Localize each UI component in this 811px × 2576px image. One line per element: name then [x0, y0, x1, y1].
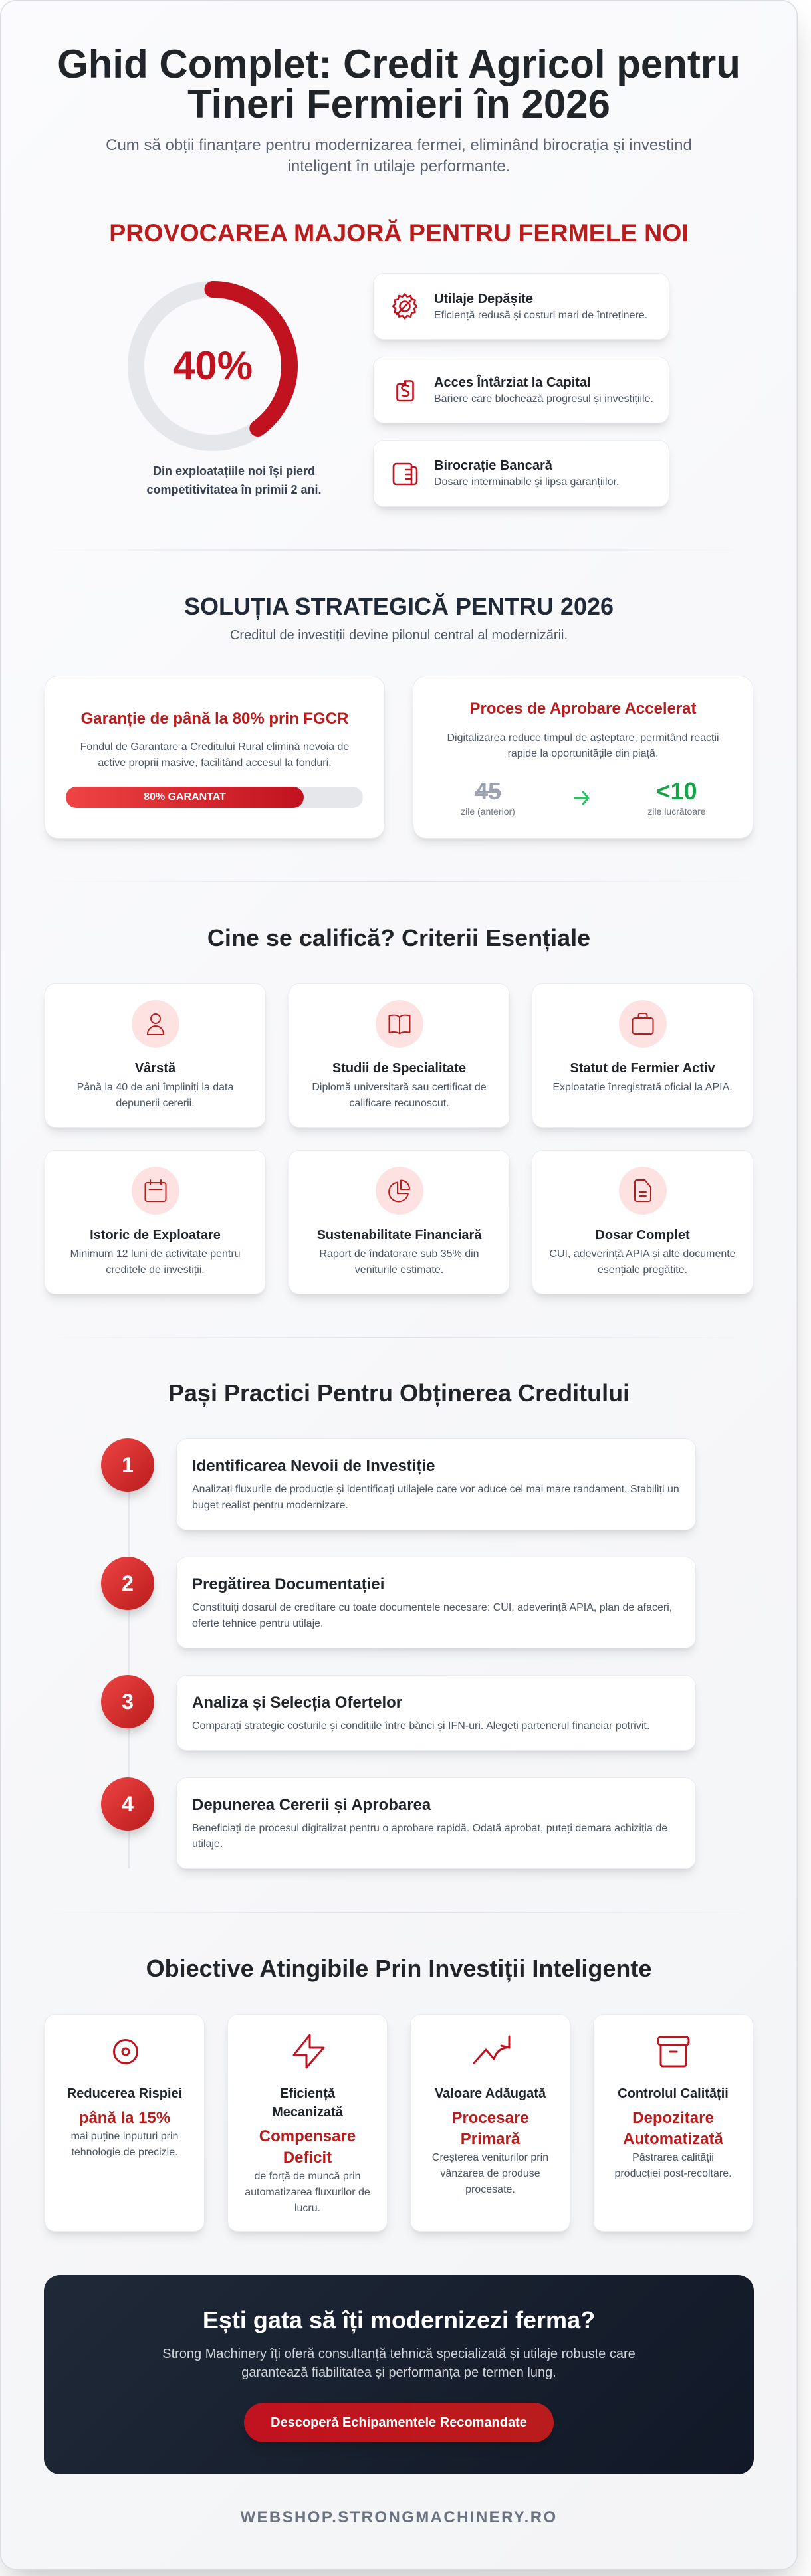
panel: complete file [532, 1150, 753, 1294]
step text: utilaje. [192, 1838, 223, 1850]
goal text: tehnologie de precizie. [71, 2147, 178, 2158]
step 3 number: 3 [122, 1690, 134, 1714]
CTA heading: Ești gata să îți modernizezi ferma? [203, 2306, 595, 2333]
step text: oferte tehnice pentru utilaje. [192, 1618, 323, 1629]
icon: open book [376, 1000, 423, 1048]
panel: bank bureaucracy [373, 440, 669, 507]
panel: age [45, 983, 266, 1128]
card title: Birocrație Bancară [434, 458, 552, 473]
criterion title: Studii de Specialitate [332, 1061, 466, 1076]
criterion text [549, 1248, 736, 1276]
step 3 card [176, 1675, 696, 1751]
goal text: Păstrarea calității [632, 2152, 714, 2163]
goal text: mai puține inputuri prin [71, 2131, 178, 2142]
heading: major challenge: PROVOCAREA MAJORĂ PENTRU FERMELE NOI [109, 219, 689, 247]
panel: FGCR guarantee [45, 676, 385, 839]
panel: farming history [45, 1150, 266, 1294]
subtitle [106, 136, 692, 175]
panel: financial sustainability [289, 1150, 510, 1294]
heading: practical steps: Pași Practici Pentru Obținerea Creditului [168, 1379, 630, 1407]
step text: Constituiți dosarul de creditare cu toate documentele necesare: CUI, adeverință APIA, plan de afaceri, [192, 1602, 672, 1613]
old value label: zile (anterior) [461, 806, 515, 817]
stat: under 10 working days [647, 777, 706, 817]
CTA button [244, 2403, 554, 2442]
title: Ghid Complet: Credit Agricol pentru [57, 42, 741, 86]
step 4 number [101, 1777, 154, 1831]
step text: Analizați fluxurile de producție și identificați utilajele care vor aduce cel mai mare randament. Stabiliți un [192, 1484, 679, 1495]
old value: 45 [475, 777, 501, 805]
timeline line [128, 1438, 130, 1868]
goal highlight: Primară [461, 2130, 520, 2148]
goal text [71, 2131, 178, 2158]
goal highlight: Automatizată [623, 2130, 723, 2148]
title: Tineri Fermieri în 2026 [187, 82, 610, 126]
step title: Identificarea Nevoii de Investiție [192, 1457, 435, 1475]
goal text [432, 2152, 548, 2195]
criterion text: esențiale pregătite. [598, 1264, 687, 1276]
card title: Proces de Aprobare Accelerat [469, 700, 697, 718]
call to action panel [44, 2275, 754, 2474]
goal text: Creșterea veniturilor prin [432, 2152, 548, 2163]
criterion title: Sustenabilitate Financiară [317, 1228, 481, 1242]
icon: trend line [473, 2036, 511, 2064]
panel: accelerated approval [413, 676, 753, 839]
new value label: zile lucrătoare [647, 806, 706, 817]
criterion text [312, 1082, 487, 1109]
goal text: procesate. [465, 2184, 515, 2195]
criterion text: Diplomă universitară sau certificat de [312, 1082, 487, 1093]
panel: outdated machinery [373, 273, 669, 340]
panel: studies [289, 983, 510, 1128]
icon: pie chart [376, 1167, 423, 1215]
CTA button: Descoperă Echipamentele Recomandate [271, 2415, 527, 2430]
goal highlight [623, 2109, 723, 2148]
criterion text: veniturile estimate. [355, 1264, 443, 1276]
progress fill: 80% GARANTAT [144, 791, 226, 803]
icon: gear [392, 293, 417, 320]
icon: lightning bolt [292, 2034, 324, 2069]
card title: Garanție de până la 80% prin FGCR [81, 710, 348, 728]
new value: <10 [656, 777, 697, 805]
goal title [272, 2086, 343, 2120]
CTA text: garantează fiabilitatea și performanța pe termen lung. [241, 2365, 556, 2380]
step 3 number [101, 1675, 154, 1728]
criterion text: CUI, adeverință APIA și alte documente [549, 1248, 736, 1260]
CTA text: Strong Machinery îți oferă consultanță tehnică specializată și utilaje robuste care [162, 2347, 636, 2361]
criterion title: Statut de Fermier Activ [570, 1061, 715, 1076]
icon: calendar [132, 1167, 179, 1215]
step 1 number: 1 [122, 1453, 134, 1477]
goal text: automatizarea fluxurilor de [245, 2187, 370, 2198]
goal highlight [259, 2128, 356, 2167]
icon: ledger [392, 462, 417, 485]
step 1 number [101, 1438, 154, 1492]
card title: Acces Întârziat la Capital [434, 375, 591, 390]
goal title: Controlul Calității [618, 2086, 729, 2101]
step 4 card [176, 1777, 696, 1869]
step 1 card [176, 1438, 696, 1530]
criterion title: Vârstă [135, 1061, 175, 1076]
CTA text [162, 2347, 636, 2380]
criterion text [77, 1082, 234, 1109]
step title: Depunerea Cererii și Aprobarea [192, 1796, 431, 1814]
card text [447, 732, 719, 759]
donut caption: Din exploatațiile noi își pierd [153, 464, 315, 478]
criterion text [70, 1248, 241, 1276]
donut caption: competitivitatea în primii 2 ani. [146, 483, 322, 496]
goal title: Valoare Adăugată [435, 2086, 546, 2101]
goal text: lucru. [294, 2203, 320, 2214]
card text: rapide la oportunitățile din piață. [508, 748, 658, 759]
step text [192, 1484, 679, 1511]
step text: Comparați strategic costurile și condițiile între bănci și IFN-uri. Alegeți partenerul financiar potrivit. [192, 1720, 649, 1732]
criterion text: Până la 40 de ani împliniți la data [77, 1082, 233, 1093]
goal title: Mecanizată [272, 2105, 343, 2120]
panel: quality control [593, 2014, 753, 2232]
goal highlight [451, 2109, 529, 2148]
panel: delayed capital access [373, 357, 669, 423]
step 2 card [176, 1557, 696, 1648]
icon: arrow [574, 791, 589, 805]
card title: Utilaje Depășite [434, 292, 533, 306]
goal text [245, 2171, 370, 2214]
goal text [614, 2152, 732, 2179]
donut chart: 40% [128, 281, 298, 451]
goal text: de forță de muncă prin [254, 2171, 361, 2182]
criterion text [319, 1248, 479, 1276]
step text [192, 1823, 667, 1850]
goal title: Eficiență [280, 2086, 335, 2101]
criterion title: Dosar Complet [595, 1228, 690, 1242]
step 4 number: 4 [122, 1792, 134, 1816]
criterion text: Raport de îndatorare sub 35% din [319, 1248, 479, 1260]
panel: mechanised efficiency [227, 2014, 388, 2232]
icon: document [619, 1167, 667, 1215]
card text: Bariere care blochează progresul și investițiile. [434, 393, 653, 405]
criterion text: Exploatație înregistrată oficial la APIA. [552, 1082, 733, 1093]
card text: Digitalizarea reduce timpul de așteptare, permițând reacții [447, 732, 719, 743]
step text: Beneficiați de procesul digitalizat pentru o aprobare rapidă. Odată aprobat, puteți demara achiziția de [192, 1823, 667, 1834]
panel: added value [410, 2014, 570, 2232]
criterion text: depunerii cererii. [116, 1098, 195, 1109]
criterion text: creditele de investiții. [106, 1264, 205, 1276]
step 2 number: 2 [122, 1571, 134, 1595]
icon: target [113, 2039, 138, 2064]
goal text: vânzarea de produse [440, 2168, 540, 2179]
title [57, 42, 741, 126]
stat: 45 days before [461, 777, 515, 817]
card text: Dosare interminabile și lipsa garanțiilor. [434, 476, 619, 488]
step text [192, 1602, 672, 1629]
icon: archive box [657, 2036, 690, 2068]
criterion title: Istoric de Exploatare [90, 1228, 221, 1242]
progress fill [66, 787, 304, 808]
heading: attainable goals: Obiective Atingibile Prin Investiții Inteligente [146, 1955, 651, 1982]
goal highlight: Procesare [451, 2109, 529, 2127]
subtitle: inteligent în utilaje performante. [288, 157, 510, 175]
step text: buget realist pentru modernizare. [192, 1500, 348, 1511]
step 2 number [101, 1557, 154, 1610]
criterion text: Minimum 12 luni de activitate pentru [70, 1248, 241, 1260]
section subtitle: Creditul de investiții devine pilonul central al modernizării. [230, 628, 568, 643]
card text [80, 742, 349, 769]
icon: dollar document [396, 380, 414, 401]
goal highlight: până la 15% [79, 2109, 170, 2127]
card text: active proprii masive, facilitând accesul la fonduri. [98, 757, 332, 769]
goal text: producției post-recoltare. [614, 2168, 732, 2179]
donut value: 40% [173, 344, 253, 388]
card text: Fondul de Garantare a Creditului Rural elimină nevoia de [80, 742, 349, 753]
progress bar: 80% [66, 787, 363, 808]
icon: briefcase [619, 1000, 667, 1048]
donut caption [146, 464, 322, 496]
panel: active farmer status [532, 983, 753, 1128]
heading: eligibility: Cine se califică? Criterii Esențiale [207, 924, 590, 951]
icon: person [132, 1000, 179, 1048]
goal highlight: Deficit [283, 2149, 332, 2167]
goal highlight: Compensare [259, 2128, 356, 2145]
footer website: WEBSHOP.STRONGMACHINERY.RO [240, 2508, 558, 2526]
criterion text: calificare recunoscut. [349, 1098, 449, 1109]
step title: Analiza și Selecția Ofertelor [192, 1694, 402, 1712]
heading: strategic solution: SOLUȚIA STRATEGICĂ PENTRU 2026 [184, 593, 614, 620]
card text: Eficiență redusă și costuri mari de întreținere. [434, 310, 647, 321]
goal highlight: Depozitare [632, 2109, 714, 2127]
goal title: Reducerea Rispiei [67, 2086, 182, 2101]
panel: risk reduction [45, 2014, 205, 2232]
step title: Pregătirea Documentației [192, 1575, 384, 1593]
subtitle: Cum să obții finanțare pentru modernizarea fermei, eliminând birocrația și investind [106, 136, 692, 154]
